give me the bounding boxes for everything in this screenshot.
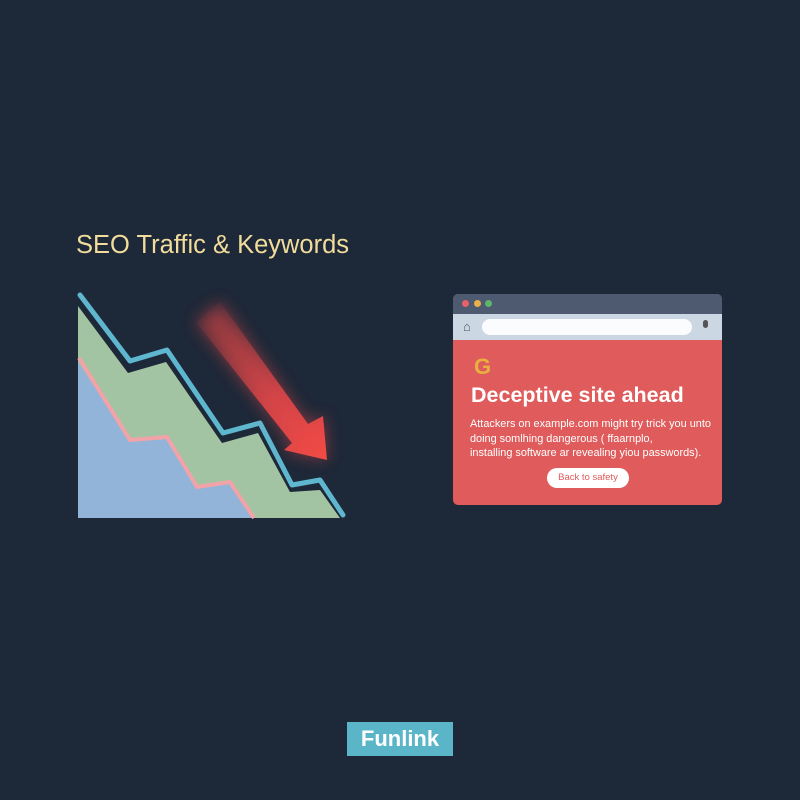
panel: browser warning — [453, 294, 722, 505]
arrow: red downward — [196, 302, 327, 460]
pink line — [79, 358, 254, 518]
heading: Deceptive site ahead — [471, 383, 684, 407]
text block: installing software ar revealing yiou passwords). — [470, 447, 701, 459]
text block: Attackers on example.com might try trick you unto — [470, 418, 711, 430]
address bar: ⌂ — [463, 319, 471, 334]
title bar — [453, 294, 722, 314]
icon: G logo: G — [474, 354, 491, 379]
blue area — [78, 362, 255, 518]
button — [547, 468, 629, 488]
logo: Funlink — [361, 726, 439, 751]
text block: doing somlhing dangerous ( ffaarnplo, — [470, 432, 653, 444]
blue line — [80, 295, 343, 515]
logo — [347, 722, 453, 756]
button: Back to safety — [558, 472, 618, 483]
address bar — [453, 314, 722, 340]
title: SEO Traffic & Keywords — [76, 231, 349, 259]
green area — [78, 306, 340, 518]
text block — [470, 418, 711, 459]
